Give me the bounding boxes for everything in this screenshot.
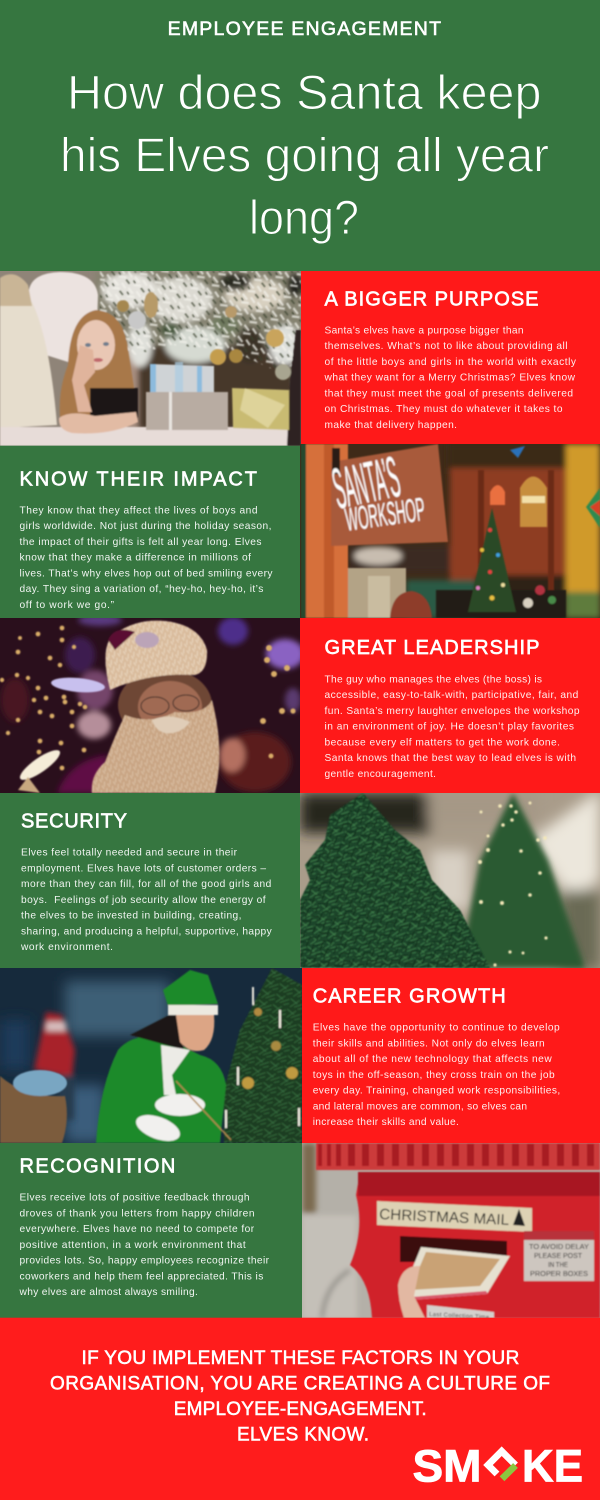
windows xyxy=(520,476,547,527)
body text xyxy=(20,506,273,611)
photo: girl under frosted Christmas tree xyxy=(0,271,303,446)
body text: girls worldwide. Not just during the holiday season, xyxy=(20,521,272,532)
person head xyxy=(390,591,432,618)
beard xyxy=(92,700,219,793)
body text: the impact of their gifts is felt all year long. Elves xyxy=(20,537,262,548)
top band xyxy=(316,1143,600,1170)
heading: CAREER GROWTH xyxy=(313,986,506,1008)
dress xyxy=(90,388,138,418)
wall star xyxy=(586,488,600,528)
box body xyxy=(350,1172,600,1318)
panel: recognition xyxy=(0,1143,600,1321)
title: How does Santa keep xyxy=(67,67,542,120)
body text: of the little boys and girls in the world with exactly xyxy=(324,357,577,368)
notice: IN THE xyxy=(548,1260,568,1269)
floor xyxy=(0,427,290,446)
cabinet xyxy=(348,568,406,618)
Christmas tree xyxy=(224,968,302,1143)
gifts xyxy=(150,364,214,393)
face xyxy=(176,1015,214,1051)
logo: Smoke: KE xyxy=(522,1440,583,1492)
sofa xyxy=(29,272,98,362)
post slot xyxy=(400,1236,507,1262)
collection plate xyxy=(427,1305,494,1321)
body text: employment. Elves have lots of customer orders – xyxy=(21,863,266,874)
toys xyxy=(535,585,545,595)
body text: Elves have the opportunity to continue to develop xyxy=(313,1023,560,1034)
body text xyxy=(18,1193,270,1298)
body text: in an environment of joy. He doesn’t play favorites xyxy=(324,722,574,732)
closing statement: ELVES KNOW. xyxy=(237,1424,369,1445)
logo: Smoke xyxy=(412,1440,583,1492)
closing statement: IF YOU IMPLEMENT THESE FACTORS IN YOUR xyxy=(82,1348,519,1369)
body text: accessible, easy-to-talk-with, participative, fair, and xyxy=(324,690,579,701)
panel: security xyxy=(0,790,600,970)
girl hair xyxy=(60,310,138,418)
heading: SECURITY xyxy=(21,810,127,832)
body text: what they want for a Merry Christmas? Elves know xyxy=(324,373,576,384)
body text: their skills and abilities. Not only do elves learn xyxy=(313,1038,545,1049)
face xyxy=(117,674,212,720)
body text: off to work we go.” xyxy=(20,600,115,611)
body text: Santa knows that the best way to lead elves is with xyxy=(324,753,576,764)
green text block xyxy=(0,793,300,968)
body text: why elves are almost always smiling. xyxy=(18,1287,198,1298)
face xyxy=(77,320,115,370)
header xyxy=(60,18,549,245)
letter xyxy=(399,1247,510,1301)
panel: great leadership xyxy=(0,614,600,793)
photo: elf painting with tree xyxy=(0,968,302,1146)
body text: that they must meet the goal of presents delivered xyxy=(324,388,573,400)
elf hat xyxy=(163,970,218,1006)
blanket xyxy=(0,302,57,428)
collection plate: Last Collection Time xyxy=(429,1312,490,1321)
glasses xyxy=(141,695,199,715)
photo: Santa's workshop sign: SANTA’S xyxy=(327,444,405,522)
body text: make that delivery happen. xyxy=(324,420,457,431)
baubles xyxy=(210,349,226,365)
bokeh dots xyxy=(0,626,296,770)
body text: droves of thank you letters from happy children xyxy=(20,1208,254,1219)
red text block xyxy=(302,968,600,1143)
heading: A BIGGER PURPOSE xyxy=(324,289,538,311)
sign board xyxy=(331,444,448,546)
notice: TO AVOID DELAY xyxy=(529,1242,589,1251)
body text: because every elf matters to get the work done. xyxy=(324,737,560,748)
logo: Smoke: SM xyxy=(412,1440,482,1492)
sign lettering xyxy=(331,456,425,532)
arm and hand xyxy=(72,345,95,412)
body text: fun. Santa’s merry laughter envelopes the workshop xyxy=(324,706,580,717)
body text: on Christmas. They must do whatever it takes to xyxy=(324,404,563,415)
panel: a bigger purpose xyxy=(0,271,600,446)
photo: two Christmas trees with lights xyxy=(300,790,600,970)
title xyxy=(60,67,549,245)
panel: career growth xyxy=(0,968,600,1146)
photo: Santa's workshop sign xyxy=(300,444,600,618)
body text: day. They sing a variation of, “hey-ho, hey-ho, it’s xyxy=(20,584,263,595)
brush xyxy=(176,1081,231,1140)
teddy xyxy=(0,274,32,306)
body text: work environment. xyxy=(20,942,113,953)
photo: red Christmas post box xyxy=(302,1143,600,1321)
body text: Santa’s elves have a purpose bigger than xyxy=(324,326,524,336)
body text: the elves to be invested in building, creating, xyxy=(21,911,242,922)
panel: know their impact xyxy=(0,444,600,618)
body text: sharing, and producing a helpful, supportive, happy xyxy=(21,926,273,937)
shelves xyxy=(436,590,566,618)
body text xyxy=(20,848,273,953)
green text block xyxy=(0,1143,302,1318)
mail label xyxy=(377,1201,532,1232)
green text block xyxy=(0,446,300,618)
ornaments in sack xyxy=(13,1070,67,1096)
body text: more than they can fill, for all of the good girls and xyxy=(21,879,272,890)
body text: every day. Training, changed work responsibilities, xyxy=(313,1086,560,1097)
body text: gentle encouragement. xyxy=(324,769,436,780)
body text: and lateral moves are common, so elves can xyxy=(313,1101,527,1112)
body text: themselves. What’s not to like about providing all xyxy=(324,341,568,352)
closing statement: EMPLOYEE-ENGAGEMENT. xyxy=(174,1399,427,1420)
body text: The guy who manages the elves (the boss) is xyxy=(324,674,542,685)
eyebrow heading: EMPLOYEE ENGAGEMENT xyxy=(168,18,441,40)
body text: They know that they affect the lives of boys and xyxy=(20,506,258,516)
tree xyxy=(468,508,516,612)
closing statement: ORGANISATION, YOU ARE CREATING A CULTURE OF xyxy=(50,1373,550,1394)
sack xyxy=(0,1076,67,1143)
body text: know that they make a difference in millions of xyxy=(20,553,251,564)
body text xyxy=(324,674,580,780)
heading: GREAT LEADERSHIP xyxy=(324,637,540,659)
body text: coworkers and help them feel appreciated. This is xyxy=(20,1271,263,1282)
photo: Santa's workshop sign: WORKSHOP xyxy=(343,490,427,538)
body text: about all of the new technology that affects new xyxy=(313,1054,552,1065)
hand xyxy=(398,1266,425,1318)
title: his Elves going all year xyxy=(60,130,549,183)
collar xyxy=(161,1045,190,1095)
title: long? xyxy=(249,192,359,245)
decorative lights xyxy=(50,676,106,694)
notice: PROPER BOXES xyxy=(530,1269,588,1278)
frosted branches xyxy=(100,271,301,375)
photo: Santa with bokeh lights xyxy=(0,614,304,793)
red text block xyxy=(300,618,600,793)
body text: boys. Feelings of job security allow the energy of xyxy=(21,895,266,906)
body text xyxy=(313,1023,560,1128)
body text: provides lots. So, happy employees recognize their xyxy=(20,1256,270,1267)
closing statement xyxy=(50,1348,550,1445)
elf jacket xyxy=(96,1037,226,1143)
body text: positive attention, in a work environment that xyxy=(20,1240,246,1251)
hat xyxy=(105,621,207,690)
lights xyxy=(478,802,548,967)
heading: KNOW THEIR IMPACT xyxy=(20,469,257,491)
right dark strip xyxy=(287,330,301,446)
body text: Elves receive lots of positive feedback through xyxy=(20,1193,250,1204)
notice: PLEASE POST xyxy=(534,1251,582,1260)
body text: lives. That’s why elves hop out of bed smiling every xyxy=(20,568,273,580)
body text: toys in the off-season, they cross train on the job xyxy=(313,1070,555,1081)
hair xyxy=(130,1012,184,1050)
body text: Elves feel totally needed and secure in their xyxy=(21,848,238,859)
body text: everywhere. Elves have no need to compete for xyxy=(20,1224,255,1235)
body text: increase their skills and value. xyxy=(313,1117,459,1128)
heading: RECOGNITION xyxy=(20,1156,175,1178)
notice xyxy=(524,1231,594,1281)
mail label: CHRISTMAS MAIL xyxy=(379,1206,509,1229)
footer xyxy=(0,1318,600,1500)
body text xyxy=(324,326,577,431)
gloves xyxy=(155,1094,205,1116)
red text block xyxy=(301,271,600,444)
